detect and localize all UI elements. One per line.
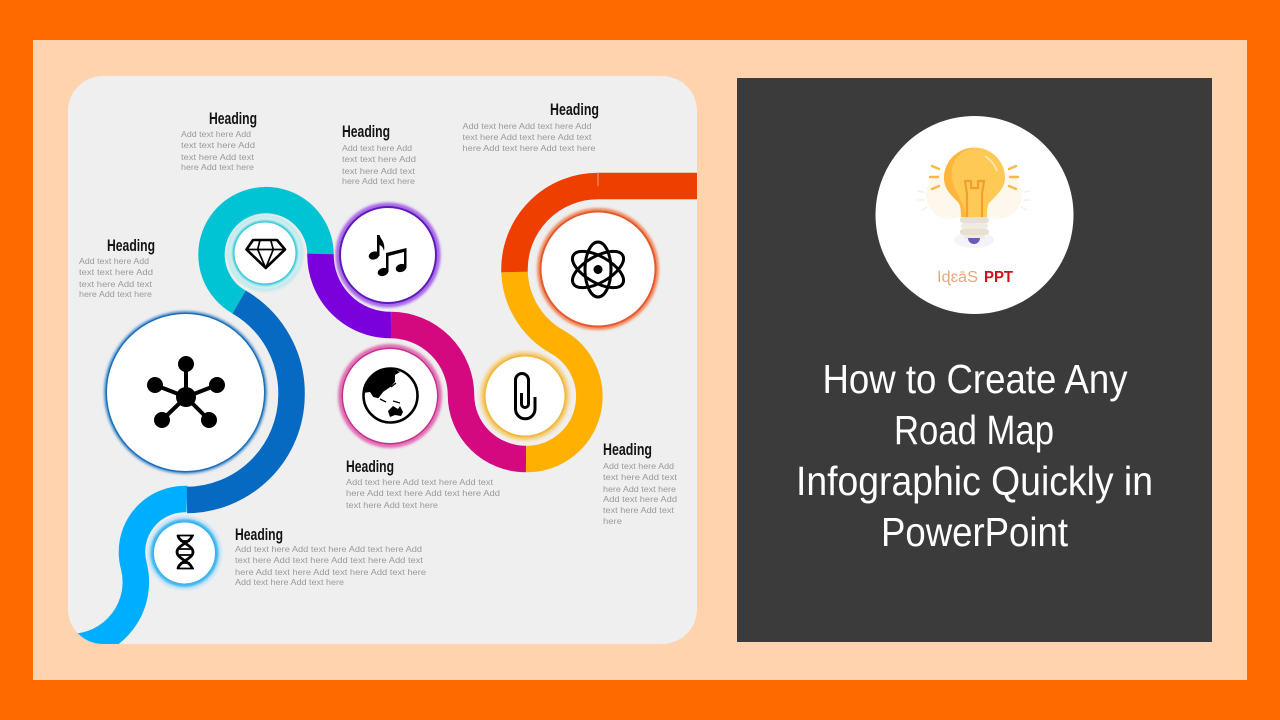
text block: top heading 1: Heading bbox=[209, 109, 257, 128]
text block: music heading: Add text here Add bbox=[342, 143, 412, 153]
title: PowerPoint bbox=[881, 509, 1069, 555]
text block: globe heading: Add text here Add text here Add text bbox=[346, 477, 494, 487]
road: red orange bbox=[514, 186, 700, 272]
road: light blue bbox=[71, 499, 187, 647]
node: music bbox=[336, 202, 440, 308]
text block: paper clip heading: Add text here Add bbox=[603, 494, 677, 504]
text block: top heading 1: text here Add text bbox=[181, 152, 255, 162]
road: dark blue bbox=[187, 302, 292, 500]
icon: music notes bbox=[368, 235, 407, 277]
text block: atom heading: text here Add text here Add text bbox=[462, 132, 592, 142]
node: dna bbox=[146, 515, 222, 591]
node: globe bbox=[338, 344, 442, 448]
text block: dna heading: Heading bbox=[235, 525, 283, 544]
text block: network heading: here Add text here bbox=[79, 289, 152, 299]
text block: globe heading bbox=[346, 457, 500, 510]
road seam bbox=[598, 173, 599, 186]
icon: globe bbox=[363, 368, 418, 422]
text block: music heading: here Add text here bbox=[342, 176, 415, 186]
icon: network bbox=[147, 356, 225, 428]
title bbox=[796, 356, 1153, 555]
text block: paper clip heading: here bbox=[603, 516, 622, 526]
text block: globe heading: Heading bbox=[346, 457, 394, 476]
text block: top heading 1: here Add text here bbox=[181, 162, 254, 172]
text block: top heading 1: text text here Add bbox=[181, 140, 255, 150]
text block: atom heading: here Add text here Add text here bbox=[462, 143, 596, 153]
icon: atom bbox=[567, 242, 629, 297]
node: paper clip bbox=[480, 351, 570, 441]
text block: music heading: text here Add text bbox=[342, 166, 416, 176]
logo circle: PPT bbox=[984, 269, 1014, 286]
node: network bbox=[104, 311, 267, 474]
text block: dna heading: Add text here Add text here bbox=[235, 577, 344, 587]
node: diamond bbox=[226, 214, 304, 292]
text block: paper clip heading: text here Add text bbox=[603, 472, 678, 482]
text block: music heading: text text here Add bbox=[342, 154, 416, 164]
road: yellow bbox=[514, 272, 589, 459]
road: purple bbox=[320, 254, 391, 325]
text block: paper clip heading: here Add text here bbox=[603, 484, 676, 494]
text block: top heading 1 bbox=[181, 109, 257, 172]
text block: music heading: Heading bbox=[342, 122, 390, 141]
text block: globe heading: here Add text here Add text here Add bbox=[346, 488, 500, 498]
icon: dna bbox=[177, 535, 194, 569]
road: magenta bbox=[391, 325, 526, 459]
text block: network heading: text text here Add bbox=[79, 267, 153, 277]
text block: dna heading: text here Add text here Add text here Add text bbox=[235, 555, 424, 565]
text block: paper clip heading: text here Add text bbox=[603, 505, 675, 515]
text block: music heading bbox=[342, 122, 416, 186]
road: teal bbox=[212, 200, 320, 302]
text block: network heading: text here Add text bbox=[79, 279, 153, 289]
text block: atom heading: Heading bbox=[550, 100, 599, 119]
text block: dna heading: here Add text here Add text here Add text here bbox=[235, 567, 426, 577]
icon: paper clip bbox=[516, 374, 535, 419]
text block: top heading 1: Add text here Add bbox=[181, 129, 251, 139]
text block: paper clip heading bbox=[603, 440, 678, 526]
title: Road Map bbox=[894, 407, 1054, 453]
logo circle bbox=[876, 116, 1074, 314]
text block: paper clip heading: Heading bbox=[603, 440, 652, 459]
text block: atom heading: Add text here Add text here Add bbox=[462, 121, 592, 131]
text block: dna heading bbox=[235, 525, 426, 587]
logo text: IɖɛāS bbox=[937, 269, 978, 286]
node: atom bbox=[537, 208, 659, 330]
panel: road map bbox=[68, 76, 700, 647]
text block: paper clip heading: Add text here Add bbox=[603, 461, 674, 471]
title: How to Create Any bbox=[822, 356, 1128, 402]
text block: dna heading: Add text here Add text here Add text here Add bbox=[235, 544, 422, 554]
text block: network heading: Heading bbox=[107, 236, 155, 255]
text block: globe heading: text here Add text here bbox=[346, 500, 438, 510]
icon: diamond bbox=[246, 240, 285, 268]
text block: network heading: Add text here Add bbox=[79, 256, 149, 266]
panel: title card bbox=[737, 78, 1212, 642]
road: segments bbox=[71, 186, 700, 647]
text block: atom heading bbox=[462, 100, 599, 153]
text block: network heading bbox=[79, 236, 155, 299]
icon: light bulb bbox=[918, 147, 1030, 248]
title: Infographic Quickly in bbox=[796, 458, 1153, 504]
